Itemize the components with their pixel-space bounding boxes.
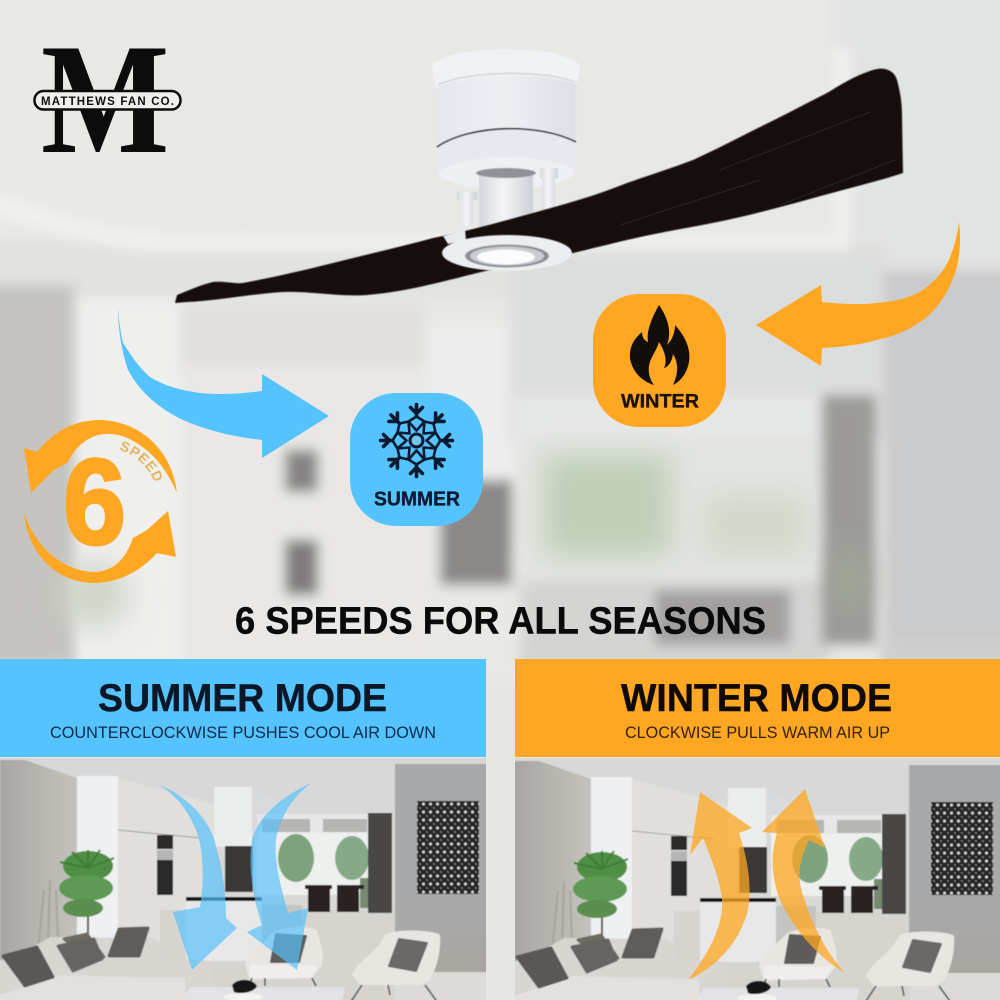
icon: 6 speed badge: 6 — [63, 434, 126, 570]
ceiling fan — [175, 49, 903, 303]
panel: summer mode: SUMMER MODE — [98, 677, 387, 720]
panel: summer mode — [0, 659, 486, 757]
panel: winter mode: CLOCKWISE PULLS WARM AIR UP — [625, 723, 890, 742]
summer room photo — [0, 755, 490, 1000]
panel: winter mode: WINTER MODE — [621, 677, 892, 720]
icon: snowflake — [380, 404, 452, 476]
title: 6 SPEEDS FOR ALL SEASONS — [235, 600, 766, 642]
icon: flame — [630, 305, 689, 385]
blurred room background — [0, 0, 1000, 680]
logo: Matthews Fan Co.: MATTHEWS FAN CO. — [41, 96, 174, 108]
icon: 6 speed badge: SPEED — [120, 442, 162, 481]
fan blade — [175, 69, 903, 303]
icon: 6 speed badge — [24, 420, 177, 583]
fan hub and light — [442, 229, 572, 271]
arrows: cool air down — [160, 783, 311, 970]
arrow: winter airflow — [756, 222, 960, 366]
winter badge — [593, 294, 726, 427]
winter badge: WINTER — [621, 390, 699, 412]
logo: Matthews Fan Co.: M — [41, 12, 169, 186]
fan canopy and stems — [432, 49, 580, 228]
arrows: warm air up — [688, 789, 845, 980]
panel: winter mode — [515, 659, 1000, 757]
winter room photo — [514, 756, 1000, 1000]
summer badge — [350, 393, 483, 526]
summer badge: SUMMER — [374, 488, 461, 510]
panel: summer mode: COUNTERCLOCKWISE PUSHES COOL AIR DOWN — [50, 723, 436, 742]
arrow: summer airflow — [118, 308, 329, 458]
